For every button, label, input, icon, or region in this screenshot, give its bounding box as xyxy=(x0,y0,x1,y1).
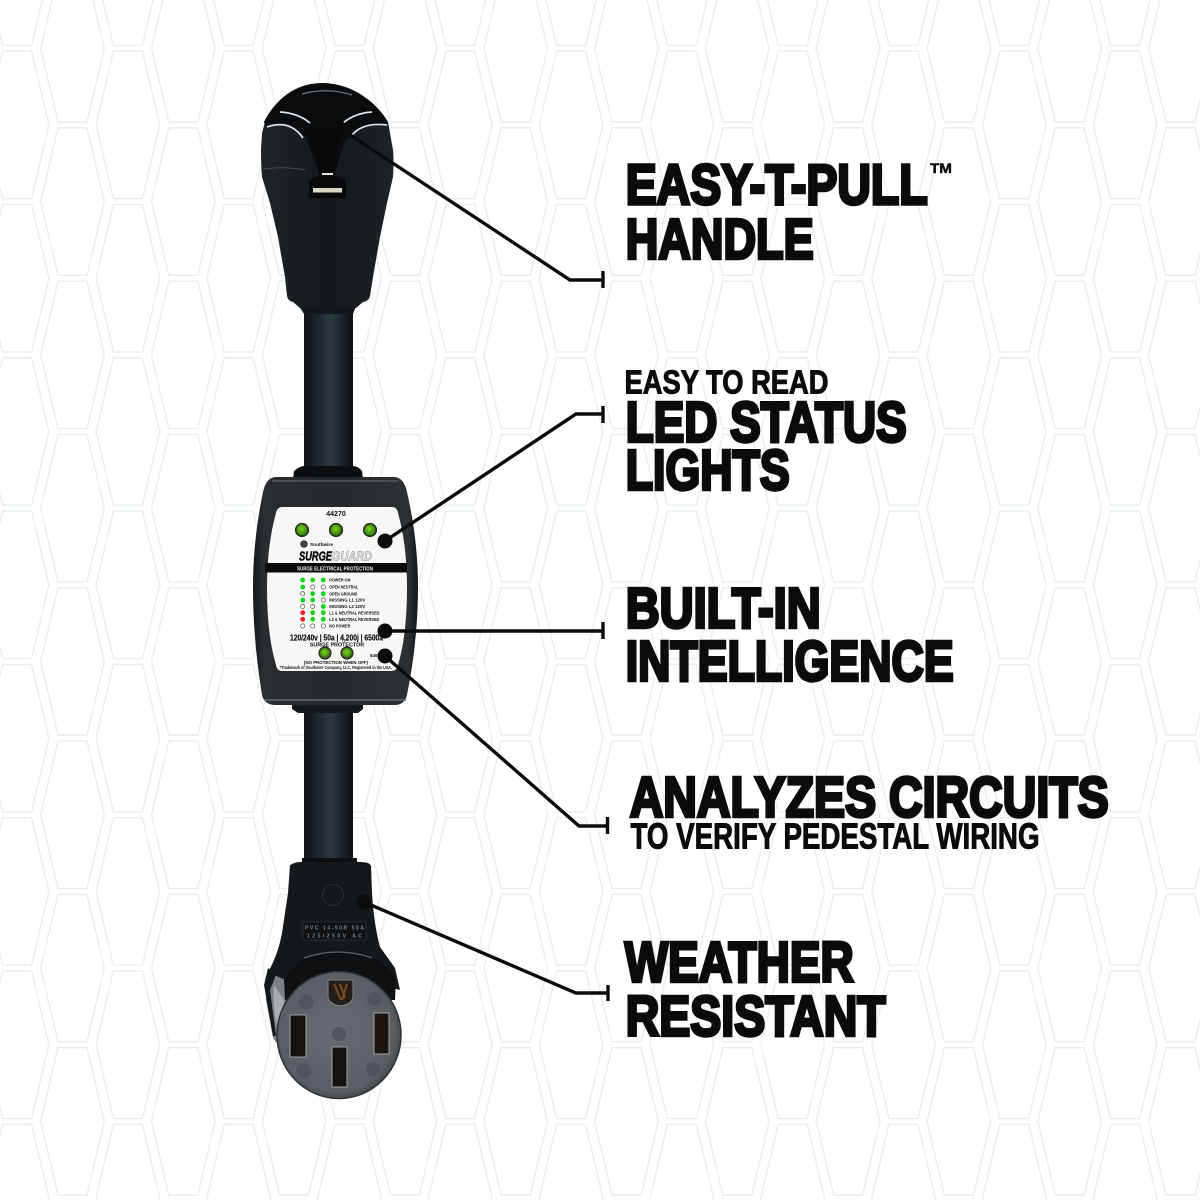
heading: weather resistant: RESISTANT xyxy=(626,984,886,1048)
heading: weather resistant: WEATHER xyxy=(625,930,854,994)
leader line: led lights xyxy=(378,406,603,548)
heading: led status lights xyxy=(624,364,907,502)
callout: analyzes circuits xyxy=(378,648,1109,856)
slot left xyxy=(290,1015,306,1057)
LED status table: L2 & NEUTRAL REVERSED xyxy=(329,617,380,623)
upper cable xyxy=(293,300,363,479)
leader line: weather xyxy=(356,894,608,1001)
ratings: 120/240v | 50a | 4,200j | 6500a xyxy=(290,634,384,642)
model number: 44270 xyxy=(326,511,346,518)
leader line: intelligence xyxy=(378,622,603,639)
LED status table: NO POWER xyxy=(329,624,351,630)
heading: easy-t-pull handle xyxy=(626,153,952,271)
product: surge protector xyxy=(253,83,418,1098)
icon: monitor housing xyxy=(253,477,418,705)
embossed label: 125/250V AC xyxy=(307,934,362,940)
LED status table: OPEN NEUTRAL xyxy=(329,585,358,591)
callout: led status lights xyxy=(378,364,907,548)
LED status table: OPEN GROUND xyxy=(329,591,358,597)
heading: led status lights: EASY TO READ xyxy=(624,364,828,401)
slot right xyxy=(374,1013,389,1054)
heading: easy-t-pull handle: TM xyxy=(930,160,952,176)
black band xyxy=(265,563,407,572)
heading: weather resistant xyxy=(625,930,886,1048)
receptacle face xyxy=(277,972,401,1098)
heading: analyzes circuits xyxy=(630,765,1109,856)
protection note: (NO PROTECTION WHEN OFF) xyxy=(304,660,369,665)
LED status table: POWER ON xyxy=(329,578,351,584)
heading: easy-t-pull handle: HANDLE xyxy=(626,207,814,271)
heading: built-in intelligence: BUILT-IN xyxy=(626,576,821,640)
embossed label xyxy=(303,922,366,940)
icon: top plug with handle xyxy=(261,83,394,308)
LED status table: MISSING L2 120V xyxy=(329,604,366,610)
heading: analyzes circuits: ANALYZES CIRCUITS xyxy=(630,765,1109,829)
callout: handle xyxy=(330,120,952,288)
heading: led status lights: LIGHTS xyxy=(626,438,790,502)
brand logo: Southwire xyxy=(310,542,333,547)
embossed label: PVC 14-50R 50A xyxy=(305,926,364,932)
LED status table xyxy=(300,578,380,630)
ground slot xyxy=(328,980,353,1006)
heading: analyzes circuits: TO VERIFY PEDESTAL WIRING xyxy=(630,816,1040,856)
brand logo: GUARD xyxy=(332,548,373,564)
top LED indicators xyxy=(296,524,376,536)
heading: built-in intelligence: INTELLIGENCE xyxy=(626,629,954,693)
lower cable xyxy=(292,703,363,865)
trademark note: *Trademark of Southwire Company, LLC, Registered in the USA. xyxy=(280,665,392,670)
heading: built-in intelligence xyxy=(626,576,954,693)
display panel xyxy=(265,507,407,671)
slot center xyxy=(332,1047,347,1087)
brand logo xyxy=(299,540,373,564)
part code: 5408 xyxy=(370,653,380,658)
heading: easy-t-pull handle: EASY-T-PULL xyxy=(626,153,928,217)
heading: led status lights: LED STATUS xyxy=(626,390,907,454)
brand logo: SURGE xyxy=(299,548,332,564)
black band: SURGE ELECTRICAL PROTECTION xyxy=(297,566,373,572)
leader line: handle xyxy=(330,120,603,288)
round pin marks xyxy=(296,992,381,1078)
icon: bottom receptacle xyxy=(264,862,401,1098)
callout: built-in intelligence xyxy=(378,576,954,693)
LED status table: MISSING L1 120V xyxy=(329,598,366,604)
LED status table: L1 & NEUTRAL REVERSED xyxy=(329,610,380,616)
surge protector label: SURGE PROTECTOR xyxy=(310,642,364,648)
surge protector LEDs xyxy=(319,647,353,659)
callout: weather resistant xyxy=(356,894,886,1048)
leader line: circuits xyxy=(378,648,608,834)
